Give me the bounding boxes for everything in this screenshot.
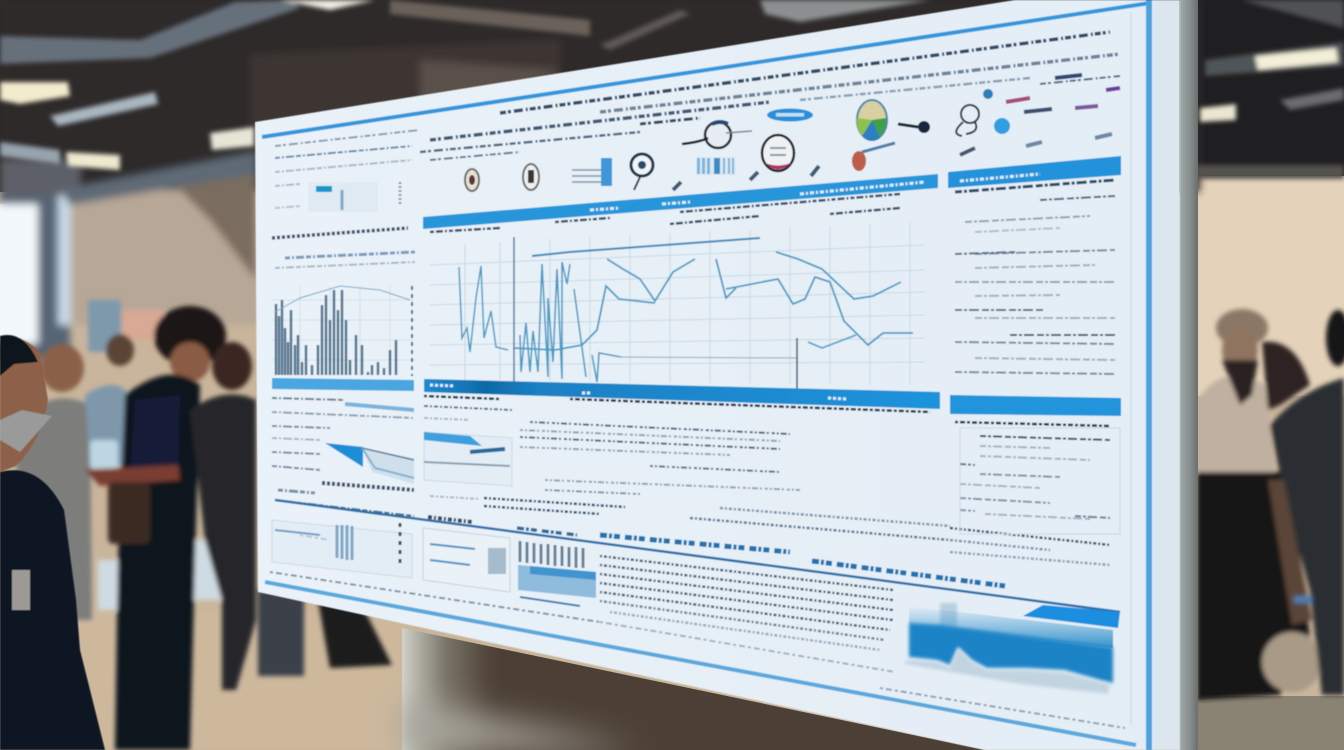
- center section header bar: [423, 174, 938, 229]
- bottom section rule: [275, 500, 1120, 612]
- crowd of people, right: [1197, 309, 1344, 700]
- bottom panels row: [272, 520, 596, 606]
- person in grey: [15, 344, 92, 620]
- icon row at poster top: [465, 75, 1120, 191]
- right text panel upper: [955, 180, 1115, 374]
- left column: top text panel: [272, 146, 415, 268]
- poster top header text: [275, 32, 1120, 160]
- dark trousers group: [1197, 472, 1310, 700]
- center section header bar lower: [424, 379, 940, 409]
- right section header bar lower: [950, 395, 1121, 416]
- hand: [12, 570, 30, 610]
- background screen and sign: [88, 300, 164, 352]
- bag on floor: [1262, 632, 1322, 692]
- icon: pen two: [750, 172, 758, 180]
- text row beneath lower bars: [424, 396, 1110, 426]
- legs behind poster: [258, 590, 392, 676]
- panel: bottom center-left table: [423, 528, 510, 592]
- data line: valley: [607, 259, 695, 301]
- face mask: [0, 410, 52, 452]
- data line: smooth curve: [513, 286, 655, 350]
- blue area: [909, 623, 1113, 683]
- right section header bar: [948, 156, 1121, 188]
- right lower text panel: [960, 436, 1110, 519]
- header bar labels: [590, 174, 1040, 210]
- icon: ring with magenta base: [762, 135, 794, 171]
- tablet and hand: [85, 440, 180, 486]
- footer text lines: [270, 535, 1125, 728]
- icon: small coloured tags: [960, 75, 1120, 155]
- chart marker: [796, 338, 798, 389]
- icon: pie badge: [857, 100, 887, 141]
- dense table text block: [600, 556, 893, 650]
- center lower text block: [520, 422, 800, 494]
- chart grid: [430, 222, 925, 385]
- chart top rule: [532, 238, 760, 256]
- mini chart: left top: [308, 182, 400, 212]
- left chart: dense bars: [272, 286, 414, 376]
- icon: circular badge: [631, 154, 653, 190]
- icon: ring with stem: [682, 122, 752, 148]
- pale objects behind figures: [98, 540, 222, 610]
- person in dark jacket: [190, 342, 256, 690]
- person with cap: [1197, 309, 1275, 472]
- dark hair figure: [1262, 342, 1310, 410]
- hair: [0, 335, 38, 376]
- icon: dark pill: [898, 121, 930, 133]
- icon: dial one: [465, 169, 479, 191]
- panel: bottom center bars: [518, 541, 596, 606]
- foreground person, left: [0, 335, 105, 750]
- lower bar label: [430, 385, 846, 399]
- panel: bottom left mini chart: [272, 520, 412, 578]
- crowd of people, left: [15, 300, 392, 750]
- chart bar pale: [940, 603, 957, 627]
- icon: list with blue column: [572, 158, 612, 186]
- left middle text: [272, 398, 414, 516]
- data line: low arc: [808, 335, 856, 348]
- person behind with blue shirt: [85, 334, 134, 465]
- stand lower reflection: [402, 700, 640, 750]
- display stand base: [402, 628, 985, 750]
- icon: barcode panel: [696, 157, 736, 175]
- left center mini chart: [424, 432, 512, 486]
- face: [0, 338, 48, 472]
- arm and bracelet: [1268, 480, 1312, 625]
- data line: right trend: [716, 259, 913, 345]
- poster support frame: [1180, 0, 1198, 750]
- blue-grey text block, lower center: [484, 498, 1110, 565]
- chart axis: [513, 237, 515, 384]
- ceiling lights, right: [1195, 0, 1344, 179]
- left center text: [424, 406, 512, 522]
- poster border lines: [262, 0, 1150, 750]
- center line chart: [430, 222, 925, 389]
- icon: dial two: [523, 164, 539, 190]
- icon: orange blob with blue tag: [852, 143, 895, 171]
- ceiling ducts and lights, left: [0, 0, 930, 170]
- person in navy: [115, 306, 226, 750]
- data line: left spikes: [459, 266, 508, 352]
- chart lower rule: [621, 357, 797, 358]
- left area chart: [325, 443, 414, 484]
- handbag: [108, 482, 150, 544]
- icon: pen three: [811, 166, 819, 176]
- data line: central spikes: [520, 262, 621, 382]
- blue top fade: [909, 606, 1113, 648]
- poster board: [255, 0, 1180, 750]
- right person: [1270, 310, 1344, 695]
- pale base area: [905, 648, 1110, 694]
- icon: pen one: [673, 182, 681, 190]
- icon: stethoscope loop: [956, 89, 1010, 136]
- bottom right area chart: [905, 603, 1120, 694]
- left section header bar: [272, 378, 414, 391]
- jacket: [0, 470, 105, 750]
- icon: blue oval label: [767, 108, 813, 122]
- data line: upper trend: [776, 252, 901, 299]
- center chart text above graph: [430, 194, 900, 232]
- bottom header text: [517, 528, 1005, 586]
- wedge label: [1023, 605, 1120, 628]
